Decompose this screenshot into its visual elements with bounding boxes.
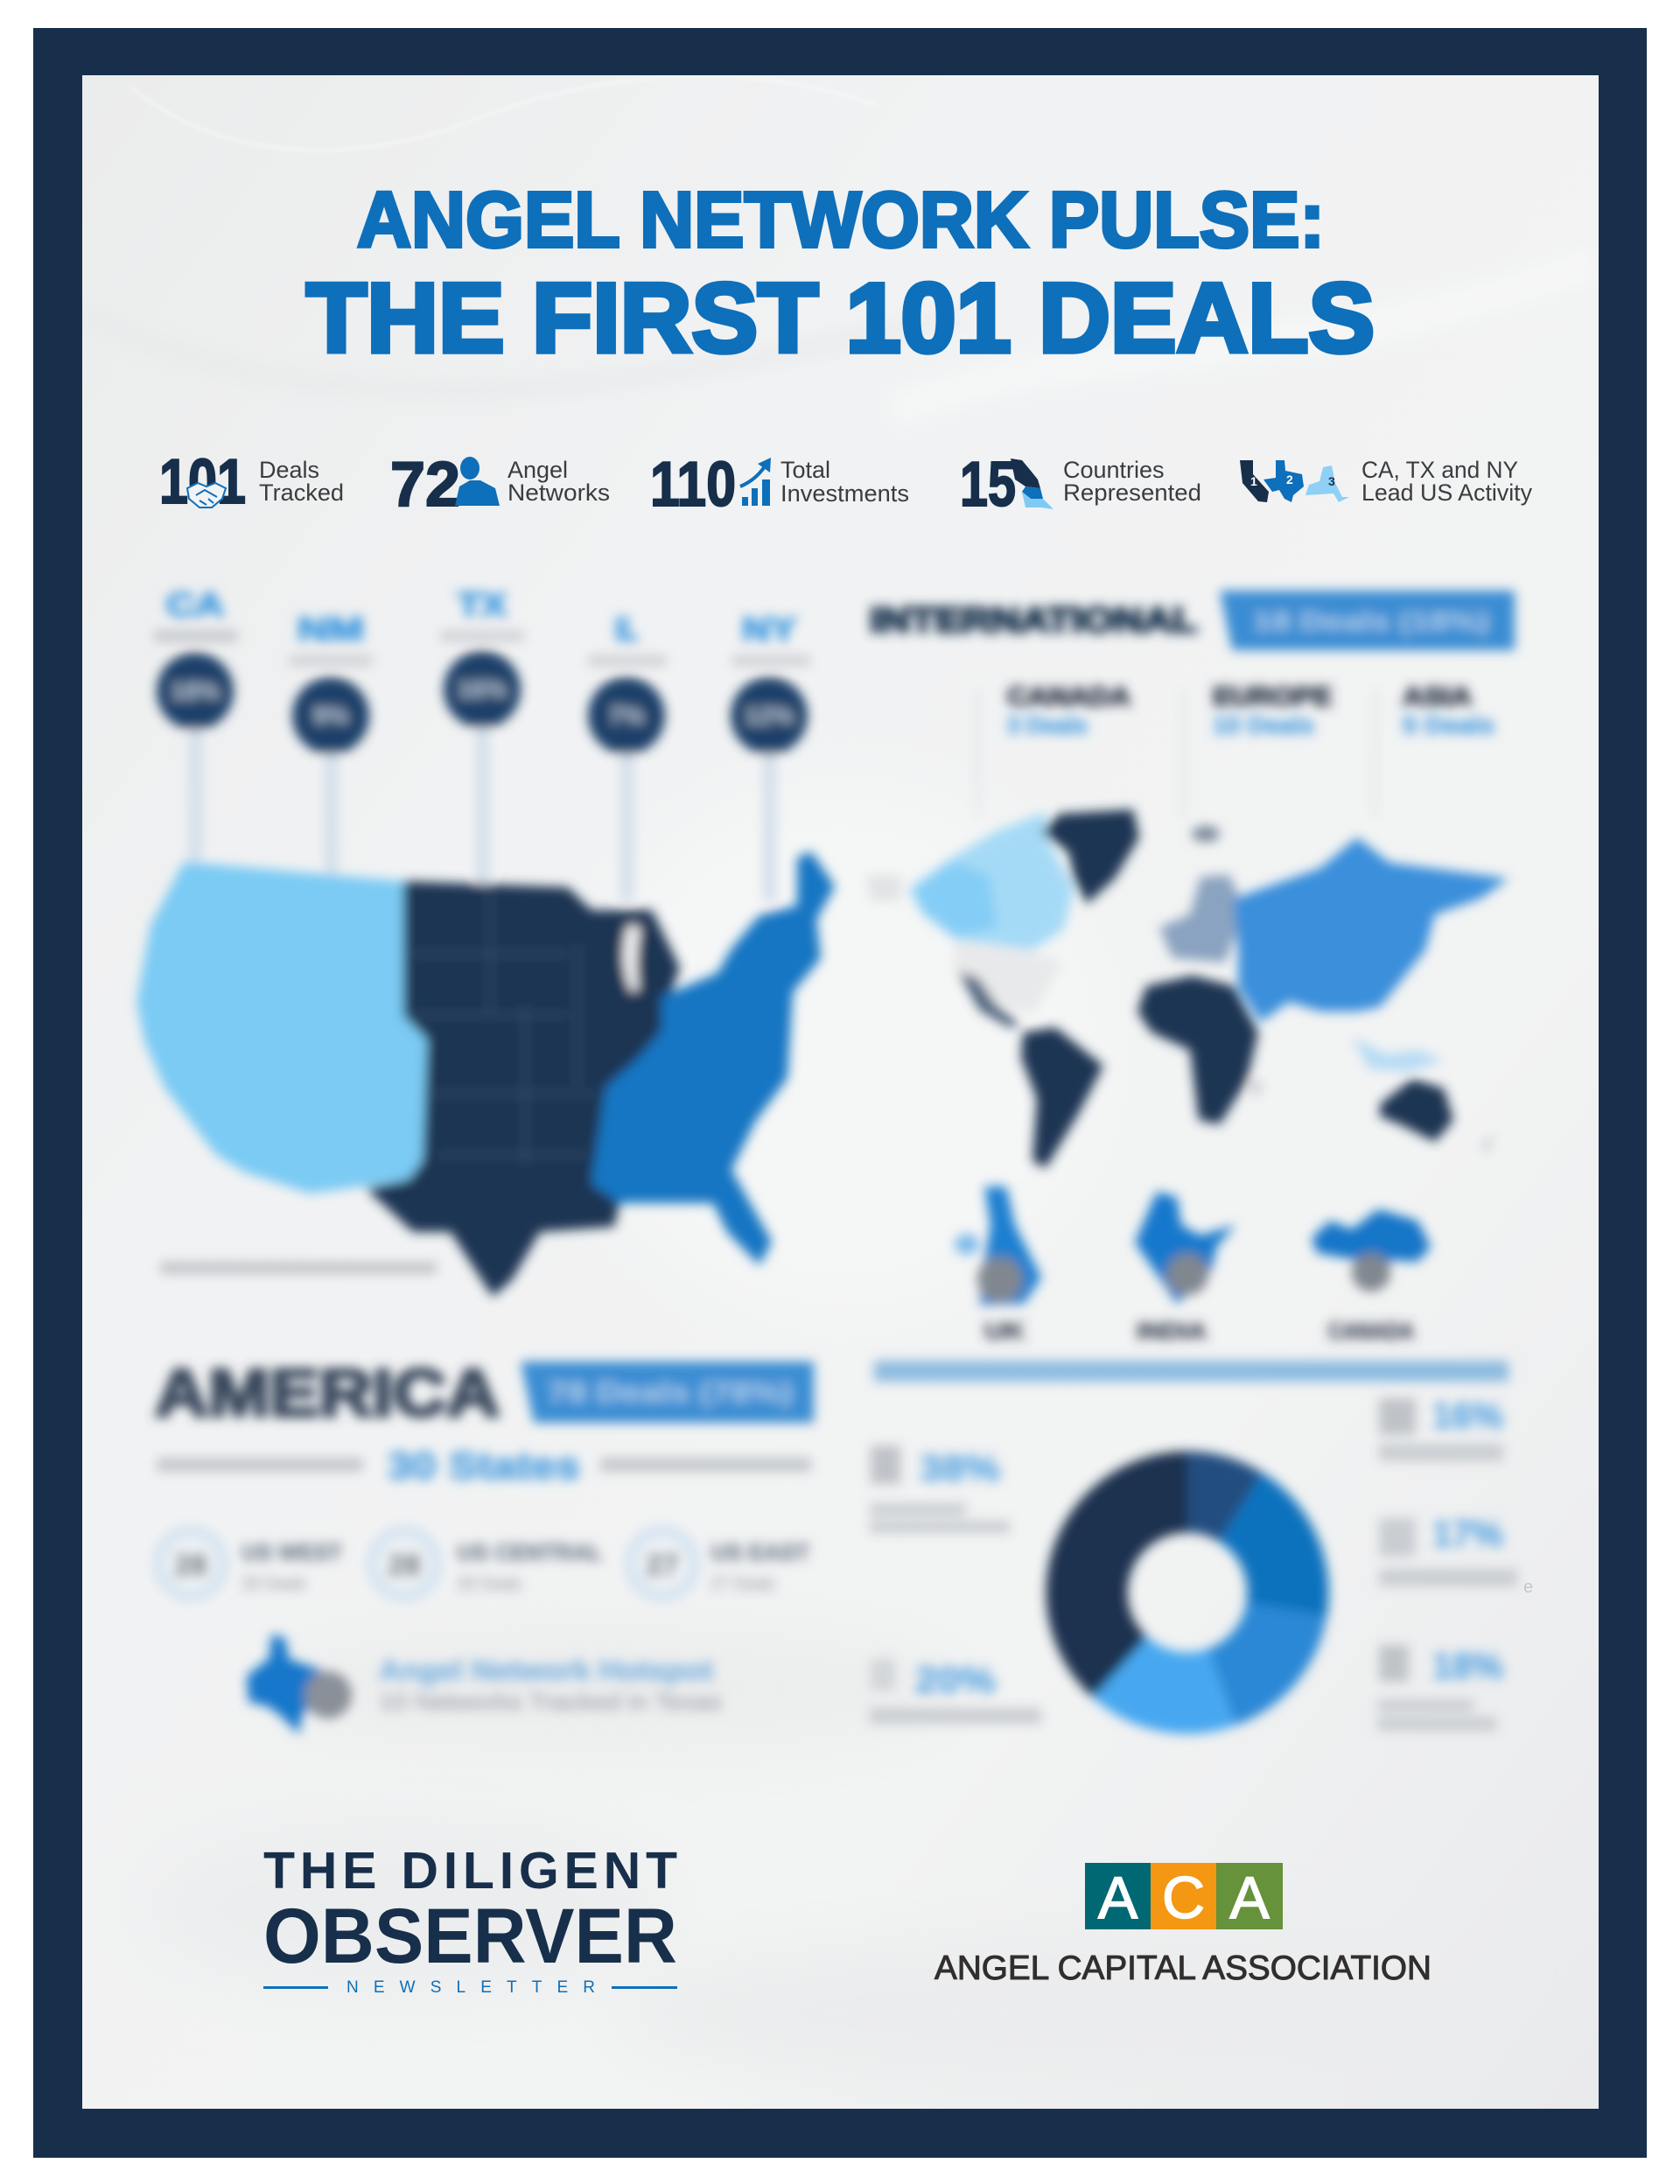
label: Asia [1403, 682, 1494, 738]
stat: 101 deals tracked [159, 447, 344, 517]
header bar [874, 1361, 1508, 1382]
pin: IL: IL [615, 612, 638, 648]
icon: person [455, 457, 500, 506]
text: angel network hotspot: Angel Network Hotspot [379, 1655, 713, 1686]
stat: 72 angel networks: 72 [390, 450, 460, 520]
label: Canada: CANADA [1007, 682, 1130, 711]
divider with state count [157, 1445, 811, 1488]
label: Asia: 5 Deals [1403, 711, 1494, 738]
country: India: INDIA [1137, 1318, 1207, 1344]
label: right middle [1379, 1513, 1517, 1586]
logo tile A teal: A [1098, 1865, 1138, 1931]
pin: IL: 7% [609, 702, 644, 729]
stat: 101 deals tracked: Deals [259, 457, 319, 483]
stat: 15 countries represented [960, 450, 1201, 520]
stat: top states: 2 [1286, 472, 1293, 486]
region: islands [1250, 1078, 1494, 1153]
panel: sector donut [870, 1361, 1517, 1731]
label: right bottom [1377, 1645, 1503, 1731]
badge: America deals [521, 1362, 814, 1423]
stat: 15 countries represented: Countries [1063, 457, 1165, 483]
badge: America deals: 78 Deals (78%) [548, 1376, 793, 1408]
stats row [159, 447, 1532, 520]
region: US Central: 28 [388, 1549, 421, 1582]
label: Europe: 10 Deals [1213, 711, 1314, 738]
pin: NY: 12% [745, 702, 794, 729]
label: Canada: 3 Deals [1007, 711, 1088, 738]
region: Canada west [914, 862, 998, 936]
stat: 72 angel networks: Angel [508, 457, 568, 483]
country: UK: UK [984, 1318, 1025, 1344]
pin: TX: 16% [458, 676, 507, 703]
segment: mid blue [1222, 1610, 1286, 1687]
pin: CA: 18% [171, 677, 220, 704]
country: India [1135, 1192, 1236, 1344]
pin: NM: 9% [313, 702, 348, 729]
pin connectors [189, 726, 776, 901]
pin: NY [731, 612, 810, 754]
icon: handshake [187, 483, 226, 508]
icon: Texas [1264, 460, 1304, 502]
country: UK [955, 1186, 1041, 1344]
logo: The Diligent Observer [263, 1842, 677, 1997]
logo line 2: OBSERVER [263, 1892, 677, 1979]
region: Canada [908, 812, 1074, 950]
logo tile A green: A [1229, 1865, 1270, 1931]
pin: NM: NM [298, 612, 364, 648]
stat: 110 total investments: Total [780, 457, 830, 483]
panel: US states map and pins [136, 587, 835, 1297]
pin: IL [588, 612, 667, 754]
map: western states [136, 862, 427, 1194]
title line 2: THE FIRST 101 DEALS [306, 263, 1375, 373]
stat: 110 total investments: Investments [780, 480, 909, 507]
logo rule left [263, 1986, 328, 1989]
region: US Central: US CENTRAL [457, 1539, 603, 1565]
stat: top states: CA, TX and NY [1362, 457, 1518, 483]
title line 1: ANGEL NETWORK PULSE: [357, 177, 1325, 264]
region: Australia [1380, 1079, 1453, 1142]
title [306, 177, 1375, 373]
icon: Texas hotspot [247, 1634, 352, 1734]
logo wordmark: ANGEL CAPITAL ASSOCIATION [934, 1950, 1432, 1987]
icon: stacked map [1011, 458, 1054, 509]
label: left bottom [870, 1659, 1041, 1724]
label: left top: 38% [920, 1447, 1000, 1488]
panel: international [866, 591, 1515, 1344]
stat: top states [1240, 457, 1532, 506]
country: Canada: CANADA [1328, 1318, 1414, 1344]
stat: 15 countries represented: Represented [1063, 480, 1201, 506]
logo rule right [612, 1986, 677, 1989]
label: Europe [1213, 682, 1332, 738]
map: central states [366, 881, 680, 1297]
stat: 110 total investments [650, 450, 909, 520]
logo line 3: NEWSLETTER [346, 1978, 595, 1997]
heading: America: AMERICA [155, 1356, 500, 1431]
logo: Angel Capital Association [934, 1863, 1432, 1987]
pin: TX: TX [458, 587, 508, 624]
region: US East [624, 1525, 809, 1602]
country: Canada [1312, 1209, 1431, 1344]
label: right top: 16% [1432, 1395, 1503, 1436]
region: South America [1021, 1027, 1103, 1168]
logo tile A teal [1085, 1863, 1152, 1931]
stat: top states: 1 [1250, 474, 1257, 488]
stat: 101 deals tracked: Tracked [259, 480, 344, 506]
pin: TX [440, 587, 524, 728]
footnote [160, 1262, 437, 1274]
logo tile C orange: C [1162, 1865, 1205, 1931]
region: USA [954, 942, 1063, 1015]
region: Greenland [1041, 809, 1139, 904]
pin: NM [289, 612, 373, 754]
icon: California [1240, 460, 1269, 502]
label: Asia: ASIA [1403, 682, 1472, 711]
donut chart [1087, 1492, 1288, 1693]
stat: top states: Lead US Activity [1362, 480, 1532, 506]
icon: growth arrow and bars [740, 458, 771, 506]
region: Africa [1138, 976, 1258, 1124]
stat: 15 countries represented: 15 [960, 450, 1016, 520]
text: angel network hotspot [379, 1655, 722, 1715]
label: right top [1379, 1395, 1503, 1461]
stray glyph: e [1523, 1578, 1533, 1597]
logo line 1: THE DILIGENT [263, 1842, 677, 1900]
world map [866, 809, 1508, 1168]
segment: blue [1241, 1507, 1288, 1610]
badge: international deals: 18 Deals (18%) [1253, 607, 1489, 636]
stat: top states: 3 [1328, 474, 1335, 488]
icon: New York [1306, 466, 1349, 502]
region: US East: 27 [646, 1549, 679, 1582]
logo tile C orange [1151, 1863, 1216, 1931]
region: US Central [366, 1525, 603, 1602]
segment: dark blue [1187, 1492, 1241, 1507]
label: Canada [1007, 682, 1130, 738]
label: right bottom: 18% [1432, 1645, 1503, 1686]
label: Europe: EUROPE [1213, 682, 1332, 711]
segment: navy [1087, 1492, 1187, 1668]
pin: CA: CA [166, 587, 224, 624]
map: eastern states [592, 851, 835, 1265]
region: US East: US EAST [710, 1539, 809, 1565]
stat: 110 total investments: 110 [650, 450, 736, 520]
region: Asia [1234, 837, 1508, 1022]
region: US Central: 28 Deals [457, 1572, 522, 1594]
stat: 72 angel networks [390, 450, 610, 520]
pin: CA [154, 587, 238, 730]
panel: America [152, 1356, 814, 1734]
divider with state count: 30 States [388, 1445, 580, 1488]
region: US West: 28 [174, 1549, 207, 1582]
logo tile A green [1216, 1863, 1283, 1931]
region: US West [152, 1525, 342, 1602]
heading: international: INTERNATIONAL [870, 601, 1197, 640]
label: left bottom: 20% [915, 1659, 996, 1700]
region: Iceland [1192, 826, 1220, 842]
stat: 72 angel networks: Networks [508, 480, 610, 506]
region: US West: US WEST [242, 1539, 342, 1565]
callout lines [977, 689, 1376, 818]
label: right middle: 17% [1432, 1513, 1503, 1554]
region: Central America [958, 971, 1019, 1028]
region: Southeast Asia [1352, 1037, 1444, 1072]
region: Europe [1159, 875, 1241, 962]
region: US West: 28 Deals [242, 1572, 306, 1594]
label: left top [870, 1446, 1010, 1533]
text: angel network hotspot: 10 Networks Tracked in Texas [379, 1689, 722, 1715]
badge: international deals [1220, 591, 1515, 650]
region: US East: 27 Deals [710, 1572, 775, 1594]
segment: light blue [1120, 1668, 1222, 1693]
region: Alaska [866, 875, 901, 901]
pin: NY: NY [742, 612, 796, 648]
stat: 101 deals tracked: 101 [159, 447, 246, 517]
